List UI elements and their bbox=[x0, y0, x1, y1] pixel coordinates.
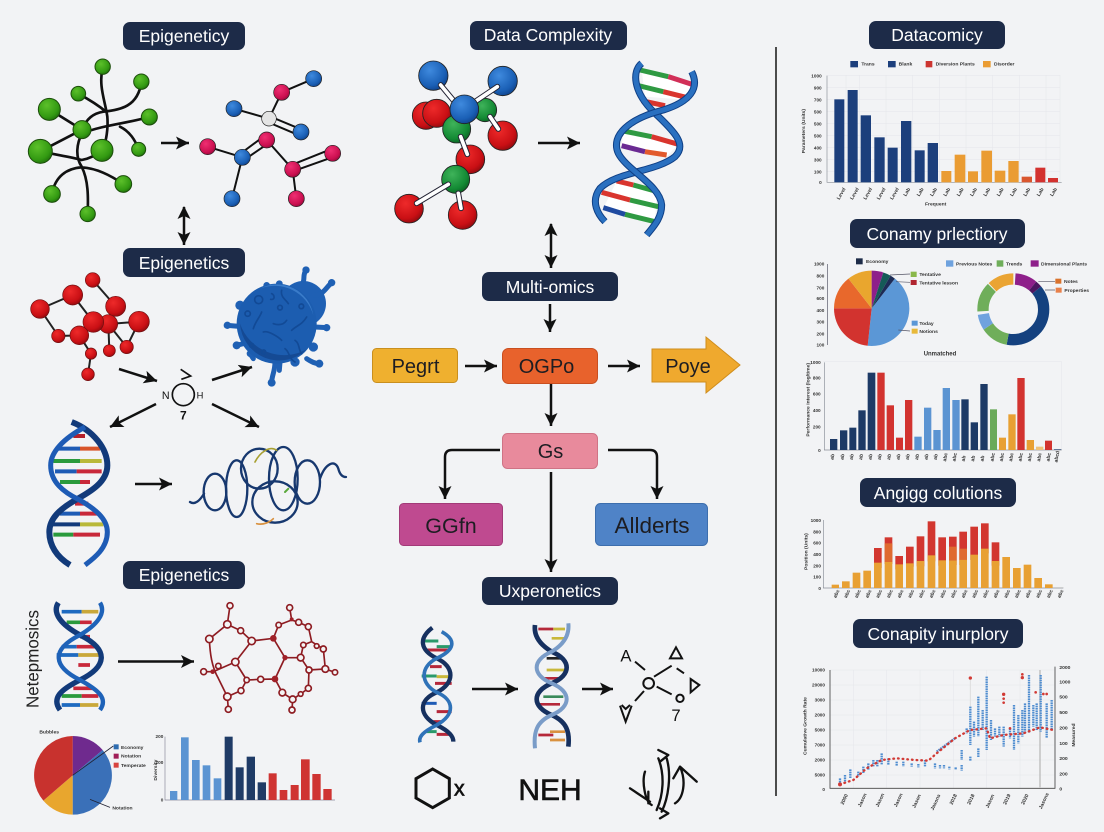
blue and pink molecule network bbox=[200, 71, 341, 207]
arrow bbox=[119, 369, 157, 381]
chart: Datacomicy bar chart: 500 bbox=[814, 121, 822, 126]
chart: line heading and colored bar chart: ab bbox=[905, 454, 912, 460]
branch arrow left bbox=[445, 450, 500, 499]
chart: Datacomicy bar chart: 700 bbox=[814, 97, 822, 102]
chart: donut chart bbox=[946, 260, 1089, 340]
title: Uxperonetics bbox=[482, 577, 618, 605]
green network bbox=[28, 59, 157, 222]
hexagon x symbol bbox=[416, 769, 465, 808]
small hexagon chemistry symbol: 7 bbox=[180, 408, 187, 422]
flow box: OGPo bbox=[502, 348, 598, 384]
chart: line heading and colored bar chart: 200 bbox=[813, 424, 821, 429]
chart: line heading and colored bar chart: ab bbox=[867, 454, 874, 460]
chart: scatter time series: 5000 bbox=[815, 773, 825, 778]
small hexagon chemistry symbol bbox=[162, 369, 203, 422]
chart: pie chart: 100 bbox=[817, 343, 825, 348]
chart: pie chart: Today bbox=[919, 321, 934, 327]
pie chart bottom left: Notation bbox=[112, 805, 133, 811]
chart: scatter time series: 10000 bbox=[812, 668, 825, 673]
title: Epigenetics lower: Epigenetics bbox=[139, 565, 229, 585]
coiled chromatin structure bbox=[190, 447, 346, 524]
chart: scatter time series: 500 bbox=[1059, 695, 1068, 701]
chart: stacked bars: abc bbox=[1046, 589, 1055, 599]
chart: scatter time series: 2020 bbox=[1020, 793, 1031, 806]
chart: scatter time series: Cumulative Growth Rate bbox=[803, 697, 809, 755]
title: Conapity inurplory: Conapity inurplory bbox=[867, 624, 1009, 644]
chart: line heading and colored bar chart: abcd bbox=[1053, 451, 1061, 463]
chart: Datacomicy bar chart: Parameters (Units) bbox=[801, 109, 807, 153]
pie chart bottom left: Notation bbox=[121, 754, 141, 760]
chart: stacked bars: 100 bbox=[813, 575, 821, 580]
chart: line heading and colored bar chart: 0 bbox=[818, 448, 821, 453]
chart: line heading and colored bar chart: ab bbox=[849, 454, 856, 460]
chart: stacked bars: 600 bbox=[813, 541, 821, 546]
chart: Datacomicy bar chart: Lab bbox=[983, 187, 992, 198]
title: Data Complexity: Data Complexity bbox=[484, 25, 612, 45]
chemical structure diagram: 7 bbox=[671, 706, 681, 725]
chart: stacked bars: Position (Units) bbox=[804, 533, 810, 570]
DNA helix lower center middle bbox=[535, 623, 569, 748]
chart: donut chart: Trends bbox=[1006, 261, 1023, 267]
chart: scatter time series: Measured bbox=[1071, 723, 1077, 747]
chart: scatter time series: 500 bbox=[1059, 710, 1068, 716]
small hexagon chemistry symbol: N bbox=[162, 390, 170, 402]
chart: pie chart: 600 bbox=[817, 296, 825, 301]
chart: Datacomicy bar chart: 400 bbox=[814, 145, 822, 150]
chart: pie chart bbox=[814, 258, 958, 348]
double arrow bbox=[550, 224, 552, 268]
chart: Datacomicy bar chart: Level bbox=[863, 186, 874, 201]
chart: scatter time series: 0 bbox=[822, 787, 825, 792]
title: Conamy prlectiory: Conamy prlectiory bbox=[866, 224, 1008, 244]
chart: pie chart: Notions bbox=[919, 329, 938, 335]
red network bbox=[31, 273, 149, 381]
chart: line heading and colored bar chart: abc bbox=[1045, 452, 1053, 462]
chart legend: Diversion Plants bbox=[936, 62, 975, 68]
chart: scatter time series: 2000 bbox=[815, 713, 825, 718]
flow box: GGfn: GGfn bbox=[425, 514, 477, 538]
chart: line heading and colored bar chart: abc bbox=[951, 452, 959, 462]
chart legend: Trans bbox=[861, 62, 875, 68]
title: Epigenetics lower bbox=[123, 561, 245, 589]
chart: pie chart: Tentative lesson bbox=[919, 280, 958, 286]
chart: stacked bars: abc bbox=[864, 589, 874, 599]
flow box: Gs bbox=[502, 434, 598, 468]
chart: stacked bars: abc bbox=[843, 589, 852, 599]
title: Multi-omics: Multi-omics bbox=[506, 277, 594, 297]
chart: pie chart: 300 bbox=[817, 319, 825, 324]
chart: stacked bars: abc bbox=[918, 589, 927, 599]
chart: stacked bars: 200 bbox=[813, 563, 821, 568]
chart: Datacomicy bar chart: Lab bbox=[969, 187, 979, 198]
chart: scatter time series: Jasons bbox=[930, 793, 943, 812]
title: Data Complexity bbox=[470, 21, 627, 50]
chart: line heading and colored bar chart: abc bbox=[1036, 452, 1043, 462]
chart: donut chart: Dimensional Plants bbox=[1041, 261, 1087, 267]
chart: Datacomicy bar chart: Lab bbox=[903, 187, 912, 198]
flow box: Pegrt bbox=[372, 348, 458, 382]
chart: Datacomicy bar chart: Lab bbox=[1023, 187, 1032, 198]
chart: stacked bars: abc bbox=[1024, 589, 1034, 599]
arrow bbox=[550, 384, 552, 426]
chart legend: Blank bbox=[899, 62, 912, 68]
chart: pie chart: 1000 bbox=[814, 261, 825, 266]
title: Epigeneticy: Epigeneticy bbox=[139, 26, 229, 46]
chart: donut chart: Previous Notes bbox=[956, 261, 993, 267]
chart: line heading and colored bar chart: ab bbox=[829, 454, 836, 460]
pie chart bottom left: Economy bbox=[121, 745, 144, 751]
chart: line heading and colored bar chart: 800 bbox=[813, 376, 821, 381]
chart: scatter time series: 200 bbox=[1059, 756, 1068, 762]
chart: scatter time series: Jason bbox=[875, 793, 886, 808]
chart: pie chart: Tentative bbox=[919, 272, 941, 278]
chart: stacked bars: 1000 bbox=[811, 518, 821, 523]
chart: stacked bars: abc bbox=[982, 589, 991, 599]
pie chart bottom left bbox=[34, 729, 146, 815]
chart: Datacomicy bar chart: Lab bbox=[1049, 187, 1059, 198]
arrow bbox=[472, 688, 518, 690]
pie chart bottom left: Temperate bbox=[121, 763, 146, 769]
chart: stacked bars: abc bbox=[992, 589, 1002, 599]
title: Datacomicy: Datacomicy bbox=[891, 25, 983, 45]
chart: scatter time series: 200 bbox=[1059, 772, 1068, 778]
bar chart bottom left bbox=[153, 734, 335, 803]
title: Multi-omics bbox=[482, 272, 618, 301]
chart: donut chart: Notes bbox=[1064, 279, 1078, 285]
chart: line heading and colored bar chart: Unmatched bbox=[924, 352, 957, 358]
title: Epigeneticy bbox=[123, 22, 245, 50]
chart: Datacomicy bar chart: Lab bbox=[929, 187, 939, 198]
chart: scatter time series: Jason bbox=[857, 793, 869, 808]
chart: stacked bars: abc bbox=[886, 589, 895, 599]
chart: scatter time series: 2000 bbox=[840, 793, 850, 806]
chart: stacked bars: 0 bbox=[818, 586, 821, 591]
vertical divider bbox=[775, 47, 777, 796]
chart: Datacomicy bar chart: Lab bbox=[996, 187, 1006, 198]
flow box: Gs: Gs bbox=[538, 441, 563, 463]
chart: stacked bars: abc bbox=[971, 589, 980, 599]
chart: Datacomicy bar chart: 900 bbox=[814, 85, 822, 90]
chart: line heading and colored bar chart: ab bbox=[839, 454, 846, 460]
chart: scatter time series: Jason bbox=[911, 794, 923, 809]
arrow bbox=[582, 688, 613, 690]
flow box: Allderts: Allderts bbox=[614, 513, 690, 538]
chart: scatter time series: 20000 bbox=[812, 683, 825, 688]
title: Conamy prlectiory bbox=[850, 219, 1025, 248]
chart: stacked bars: abc bbox=[1014, 589, 1023, 599]
chart: scatter time series: 2019 bbox=[1002, 793, 1013, 806]
chart: line heading and colored bar chart: abc bbox=[999, 452, 1006, 462]
flow box: GGfn bbox=[400, 504, 502, 546]
title: Conapity inurplory bbox=[853, 619, 1023, 648]
chemical structure diagram: A bbox=[620, 647, 632, 666]
chart: scatter time series: 7000 bbox=[815, 743, 825, 748]
title: Angigg colutions bbox=[860, 478, 1016, 507]
vertical label: Netepmosics: Netepmosics bbox=[22, 610, 42, 708]
title: Angigg colutions: Angigg colutions bbox=[874, 483, 1002, 503]
chart: line heading and colored bar chart: ab bbox=[886, 454, 893, 460]
chart legend bbox=[850, 61, 1015, 68]
chart: line heading and colored bar chart: ab bbox=[858, 454, 865, 460]
chart: scatter time series: Jason bbox=[985, 794, 996, 809]
arrow bbox=[538, 142, 580, 144]
chart: stacked bars: abc bbox=[1035, 589, 1044, 599]
chart: Datacomicy bar chart: Level bbox=[876, 186, 888, 201]
small hexagon chemistry symbol: H bbox=[197, 391, 203, 401]
arrow bbox=[465, 365, 497, 367]
blue virus cell bbox=[224, 266, 335, 387]
chart: Datacomicy bar chart: Lab bbox=[1009, 187, 1019, 198]
scribble arrows symbol bbox=[630, 750, 697, 818]
arrow bbox=[549, 304, 551, 332]
chart: line heading and colored bar chart: ab bbox=[877, 454, 884, 460]
chart legend: Disorder bbox=[994, 62, 1015, 68]
chart: Datacomicy bar chart bbox=[801, 61, 1062, 208]
chart: scatter time series: 2018 bbox=[949, 793, 959, 806]
chart: stacked bars: abc bbox=[950, 589, 959, 599]
chart: scatter time series: 0 bbox=[1059, 787, 1062, 793]
flow box: Pegrt: Pegrt bbox=[392, 356, 440, 378]
chart: stacked bars: 400 bbox=[813, 552, 821, 557]
chart: stacked bars: abc bbox=[896, 589, 906, 599]
red ring network bbox=[201, 603, 338, 713]
chart: Datacomicy bar chart: Frequent bbox=[925, 202, 947, 208]
chart: line heading and colored bar chart: ab bbox=[970, 455, 977, 462]
arrow bbox=[550, 472, 552, 572]
chart: Datacomicy bar chart: Lab bbox=[916, 187, 926, 198]
chart: stacked bars bbox=[804, 518, 1066, 599]
chart: stacked bars: abc bbox=[960, 589, 970, 599]
hexagon x symbol: x bbox=[454, 777, 465, 801]
title: Epigenetics upper bbox=[123, 248, 245, 277]
chart: line heading and colored bar chart: ab bbox=[979, 455, 986, 462]
chart: line heading and colored bar chart: abc bbox=[989, 452, 997, 462]
chart: line heading and colored bar chart: ab bbox=[933, 454, 940, 460]
chart: pie chart: 200 bbox=[817, 331, 825, 336]
chart: Datacomicy bar chart: 500 bbox=[814, 109, 822, 114]
chart: Datacomicy bar chart: Lab bbox=[1036, 187, 1046, 198]
chart: stacked bars: abc bbox=[928, 589, 938, 599]
chart: stacked bars: abc bbox=[1056, 589, 1066, 599]
NEH symbol: NEH bbox=[518, 774, 582, 807]
chart: Datacomicy bar chart: Level bbox=[836, 186, 848, 201]
chart: Datacomicy bar chart: 0 bbox=[819, 180, 822, 185]
pie chart bottom left: Bubbles bbox=[39, 729, 59, 735]
chart: Datacomicy bar chart: 1000 bbox=[811, 73, 822, 78]
DNA helix lower left bbox=[56, 603, 103, 710]
arrow bbox=[161, 142, 189, 144]
chart: pie chart: 700 bbox=[817, 285, 825, 290]
chart: scatter time series: 200 bbox=[1059, 725, 1068, 731]
DNA helix left bbox=[49, 422, 107, 565]
chart: scatter time series: 2018 bbox=[966, 793, 977, 806]
arrow bbox=[608, 365, 640, 367]
chart: line heading and colored bar chart: 400 bbox=[813, 408, 821, 413]
chart: stacked bars: abc bbox=[832, 589, 842, 599]
title: Epigenetics upper: Epigenetics bbox=[139, 253, 229, 273]
bar chart bottom left: Diversity bbox=[153, 759, 159, 781]
chart: pie chart: 400 bbox=[817, 308, 825, 313]
chart: scatter time series bbox=[803, 665, 1077, 812]
chart: scatter time series: Jason bbox=[893, 793, 905, 808]
double arrow bbox=[183, 207, 185, 245]
chemical structure diagram bbox=[620, 647, 699, 725]
chart: stacked bars: abc bbox=[939, 589, 948, 599]
chart: line heading and colored bar chart: ab bbox=[961, 455, 968, 462]
chart: donut chart: Properties bbox=[1064, 288, 1089, 294]
DNA helix top center bbox=[595, 63, 695, 235]
chart: line heading and colored bar chart: Performance Interest (log/time) bbox=[805, 363, 811, 437]
chart: line heading and colored bar chart: 600 bbox=[813, 392, 821, 397]
title: Datacomicy bbox=[869, 21, 1005, 49]
arrow bbox=[135, 483, 172, 485]
flow box: OGPo: OGPo bbox=[519, 356, 574, 378]
chart: stacked bars: abc bbox=[875, 589, 884, 599]
chart: line heading and colored bar chart: ab bbox=[923, 454, 930, 460]
branch arrow right bbox=[608, 450, 657, 499]
chart: scatter time series: 100 bbox=[1059, 741, 1068, 747]
arrow bbox=[212, 404, 259, 427]
chart: scatter time series: 2000 bbox=[815, 758, 825, 763]
chart: scatter time series: 5000 bbox=[815, 728, 825, 733]
bar chart bottom left: 0 bbox=[161, 798, 164, 803]
chart: Datacomicy bar chart: Lab bbox=[943, 187, 952, 198]
chart: line heading and colored bar chart: ab bbox=[914, 454, 921, 460]
chart: scatter time series: Jasons bbox=[1038, 792, 1051, 810]
chart: stacked bars: abc bbox=[907, 589, 916, 599]
chart: line heading and colored bar chart: abc bbox=[1027, 452, 1034, 462]
chart: Datacomicy bar chart: 500 bbox=[814, 133, 822, 138]
arrow bbox=[118, 660, 194, 663]
flow box: Allderts bbox=[596, 504, 708, 546]
chart: line heading and colored bar chart: abc bbox=[1017, 452, 1025, 462]
bar chart bottom left: 100 bbox=[156, 760, 164, 765]
chart: Datacomicy bar chart: Level bbox=[889, 186, 901, 201]
flow arrow box: Poye bbox=[652, 337, 740, 393]
arrow bbox=[110, 404, 156, 427]
chart: scatter time series: 2000 bbox=[1059, 665, 1071, 671]
chart: line heading and colored bar chart: abc bbox=[1008, 452, 1015, 462]
chart: scatter time series: 3000 bbox=[815, 698, 825, 703]
chart: line heading and colored bar chart: abc bbox=[942, 452, 949, 462]
chart: scatter time series: 1000 bbox=[1059, 680, 1071, 686]
chart: line heading and colored bar chart: 1000 bbox=[810, 360, 821, 365]
flow arrow box: Poye: Poye bbox=[665, 356, 711, 378]
molecule ball and stick bbox=[395, 61, 517, 229]
chart: pie chart: Economy bbox=[866, 259, 889, 265]
chart: Datacomicy bar chart: 100 bbox=[814, 169, 822, 174]
chart: Datacomicy bar chart: 300 bbox=[814, 157, 822, 162]
chart: pie chart: 800 bbox=[817, 273, 825, 278]
chart: stacked bars: 800 bbox=[813, 529, 821, 534]
chart: Datacomicy bar chart: Level bbox=[849, 186, 861, 201]
chart: line heading and colored bar chart bbox=[805, 352, 1062, 463]
chart: line heading and colored bar chart: ab bbox=[895, 454, 902, 460]
DNA helix lower center left bbox=[420, 628, 453, 742]
title: Uxperonetics: Uxperonetics bbox=[499, 581, 601, 601]
arrow bbox=[212, 367, 252, 380]
chart: stacked bars: abc bbox=[1003, 589, 1012, 599]
chart: stacked bars: abc bbox=[854, 589, 863, 599]
chart: Datacomicy bar chart: Lab bbox=[956, 187, 966, 198]
bar chart bottom left: 200 bbox=[156, 734, 164, 739]
